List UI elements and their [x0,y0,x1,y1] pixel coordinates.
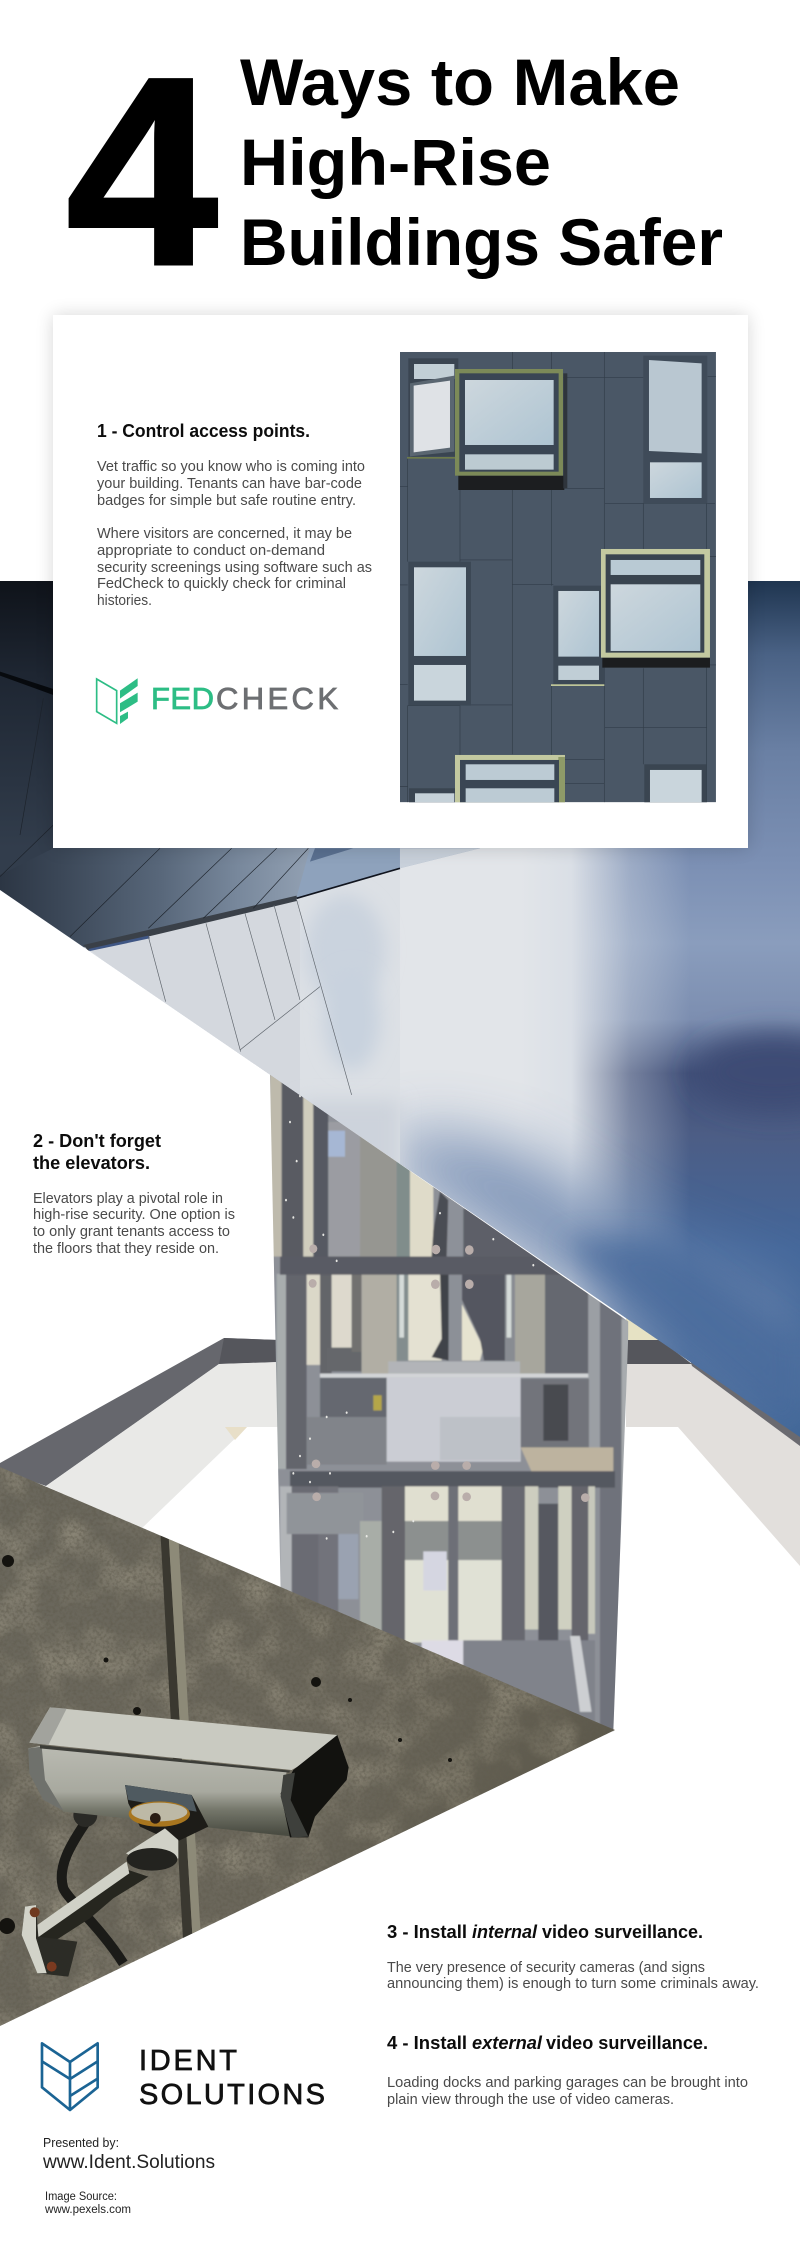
image source: www.pexels.com [44,2204,131,2216]
camera arm [22,1862,148,1977]
facade seams [400,352,716,802]
glass tint [280,1084,615,1710]
text block 2: Elevators play a pivotal role in [33,1191,223,1207]
heading 3: internal [472,1922,538,1942]
text block 2 [33,1191,235,1257]
Ident Solutions logo: SOLUTIONS [139,2079,325,2111]
left balcony [0,1338,278,1530]
text block 1: Vet traffic so you know who is coming into [97,459,365,475]
beams [280,1256,615,1488]
reflected lights [285,1095,534,1540]
FedCheck logo [97,678,338,724]
text block 4: Loading docks and parking garages can be brought into [387,2075,748,2091]
section 3 text [387,1922,759,1992]
heading 3: video surveillance. [542,1922,703,1942]
dark sky blob [695,1034,800,1110]
building facade photo [400,352,716,807]
FedCheck logo: CHECK [216,681,338,716]
FedCheck logo: FED [151,681,214,716]
heading 3 [387,1922,703,1942]
heading 2: the elevators. [33,1153,150,1173]
section 2 text [33,1131,235,1257]
window: olive box upper [455,369,567,490]
elevator photo [267,1070,633,1738]
text block 1 [97,459,372,609]
window: pale box right [601,549,710,668]
window: left tall [408,562,471,706]
title [240,45,723,279]
title: Ways to Make [240,45,680,119]
text block 1: security screenings using software such as [97,560,372,576]
text block 1: FedCheck to quickly check for criminal [97,576,346,592]
text block 2: to only grant tenants access to [33,1224,230,1240]
text block 3: The very presence of security cameras (and signs [387,1960,705,1976]
camera housing [28,1707,349,1837]
text block 2: high-rise security. One option is [33,1207,235,1223]
wall holes [0,1555,452,1934]
heading 4: video surveillance. [546,2033,708,2053]
text block 3 [387,1960,759,1992]
cable [62,1803,123,1963]
concrete wall photo [0,1460,620,2030]
text block 4: plain view through the use of video cameras. [387,2092,674,2108]
lower elevator [280,1486,595,1731]
window: bottom left [409,788,455,802]
blue blurred sky [0,581,800,1441]
presented by [42,2136,215,2173]
big number 4: 4 [66,21,220,321]
heading 4 [387,2033,708,2053]
presented by: Presented by: [43,2136,119,2150]
right balcony [626,1318,800,1566]
section 4 text [387,2033,748,2108]
icon: Ident shield [42,2043,98,2110]
window: upper left casement [407,358,458,459]
wall joint [160,1536,192,1938]
icon: FedCheck leaf [97,678,138,724]
pale sky [84,848,681,1348]
text block 1: Where visitors are concerned, it may be [97,526,352,542]
middle elevator car [277,1274,629,1736]
text block 1: histories. [97,593,152,609]
text block 3: announcing them) is enough to turn some criminals away. [387,1976,759,1992]
image source [44,2191,131,2216]
heading 4: 4 - Install [387,2033,467,2053]
text block 1: appropriate to conduct on-demand [97,543,325,559]
Ident Solutions logo: IDENT [139,2045,237,2077]
heading 1: 1 - Control access points. [97,421,310,441]
text block 1: badges for simple but safe routine entry. [97,493,356,509]
security camera [22,1707,349,1977]
heading 4: external [472,2033,543,2053]
roof panels [0,581,480,1095]
text block 4 [387,2075,748,2108]
upper elevator shaft [270,1070,540,1259]
clouds [92,886,401,1164]
panel: card [53,315,748,848]
blue shade along the diagonal [380,1130,800,1445]
heading 2: 2 - Don't forget [33,1131,161,1151]
title: High-Rise [240,125,551,199]
heading 2 [33,1131,161,1173]
image source: Image Source: [45,2191,117,2203]
camera bracket [125,1785,208,1871]
Ident Solutions logo [42,2043,325,2111]
title: Buildings Safer [240,205,723,279]
window: bottom box [455,755,565,807]
window: middle [551,586,604,686]
glass fixings [309,1244,590,1502]
presented by: www.Ident.Solutions [42,2152,215,2173]
window: upper right [643,356,707,503]
heading 3: 3 - Install [387,1922,467,1942]
sky and roof photo [0,581,800,1445]
text block 1: your building. Tenants can have bar-code [97,476,362,492]
window: bottom right [644,764,707,804]
text block 2: the floors that they reside on. [33,1241,219,1257]
